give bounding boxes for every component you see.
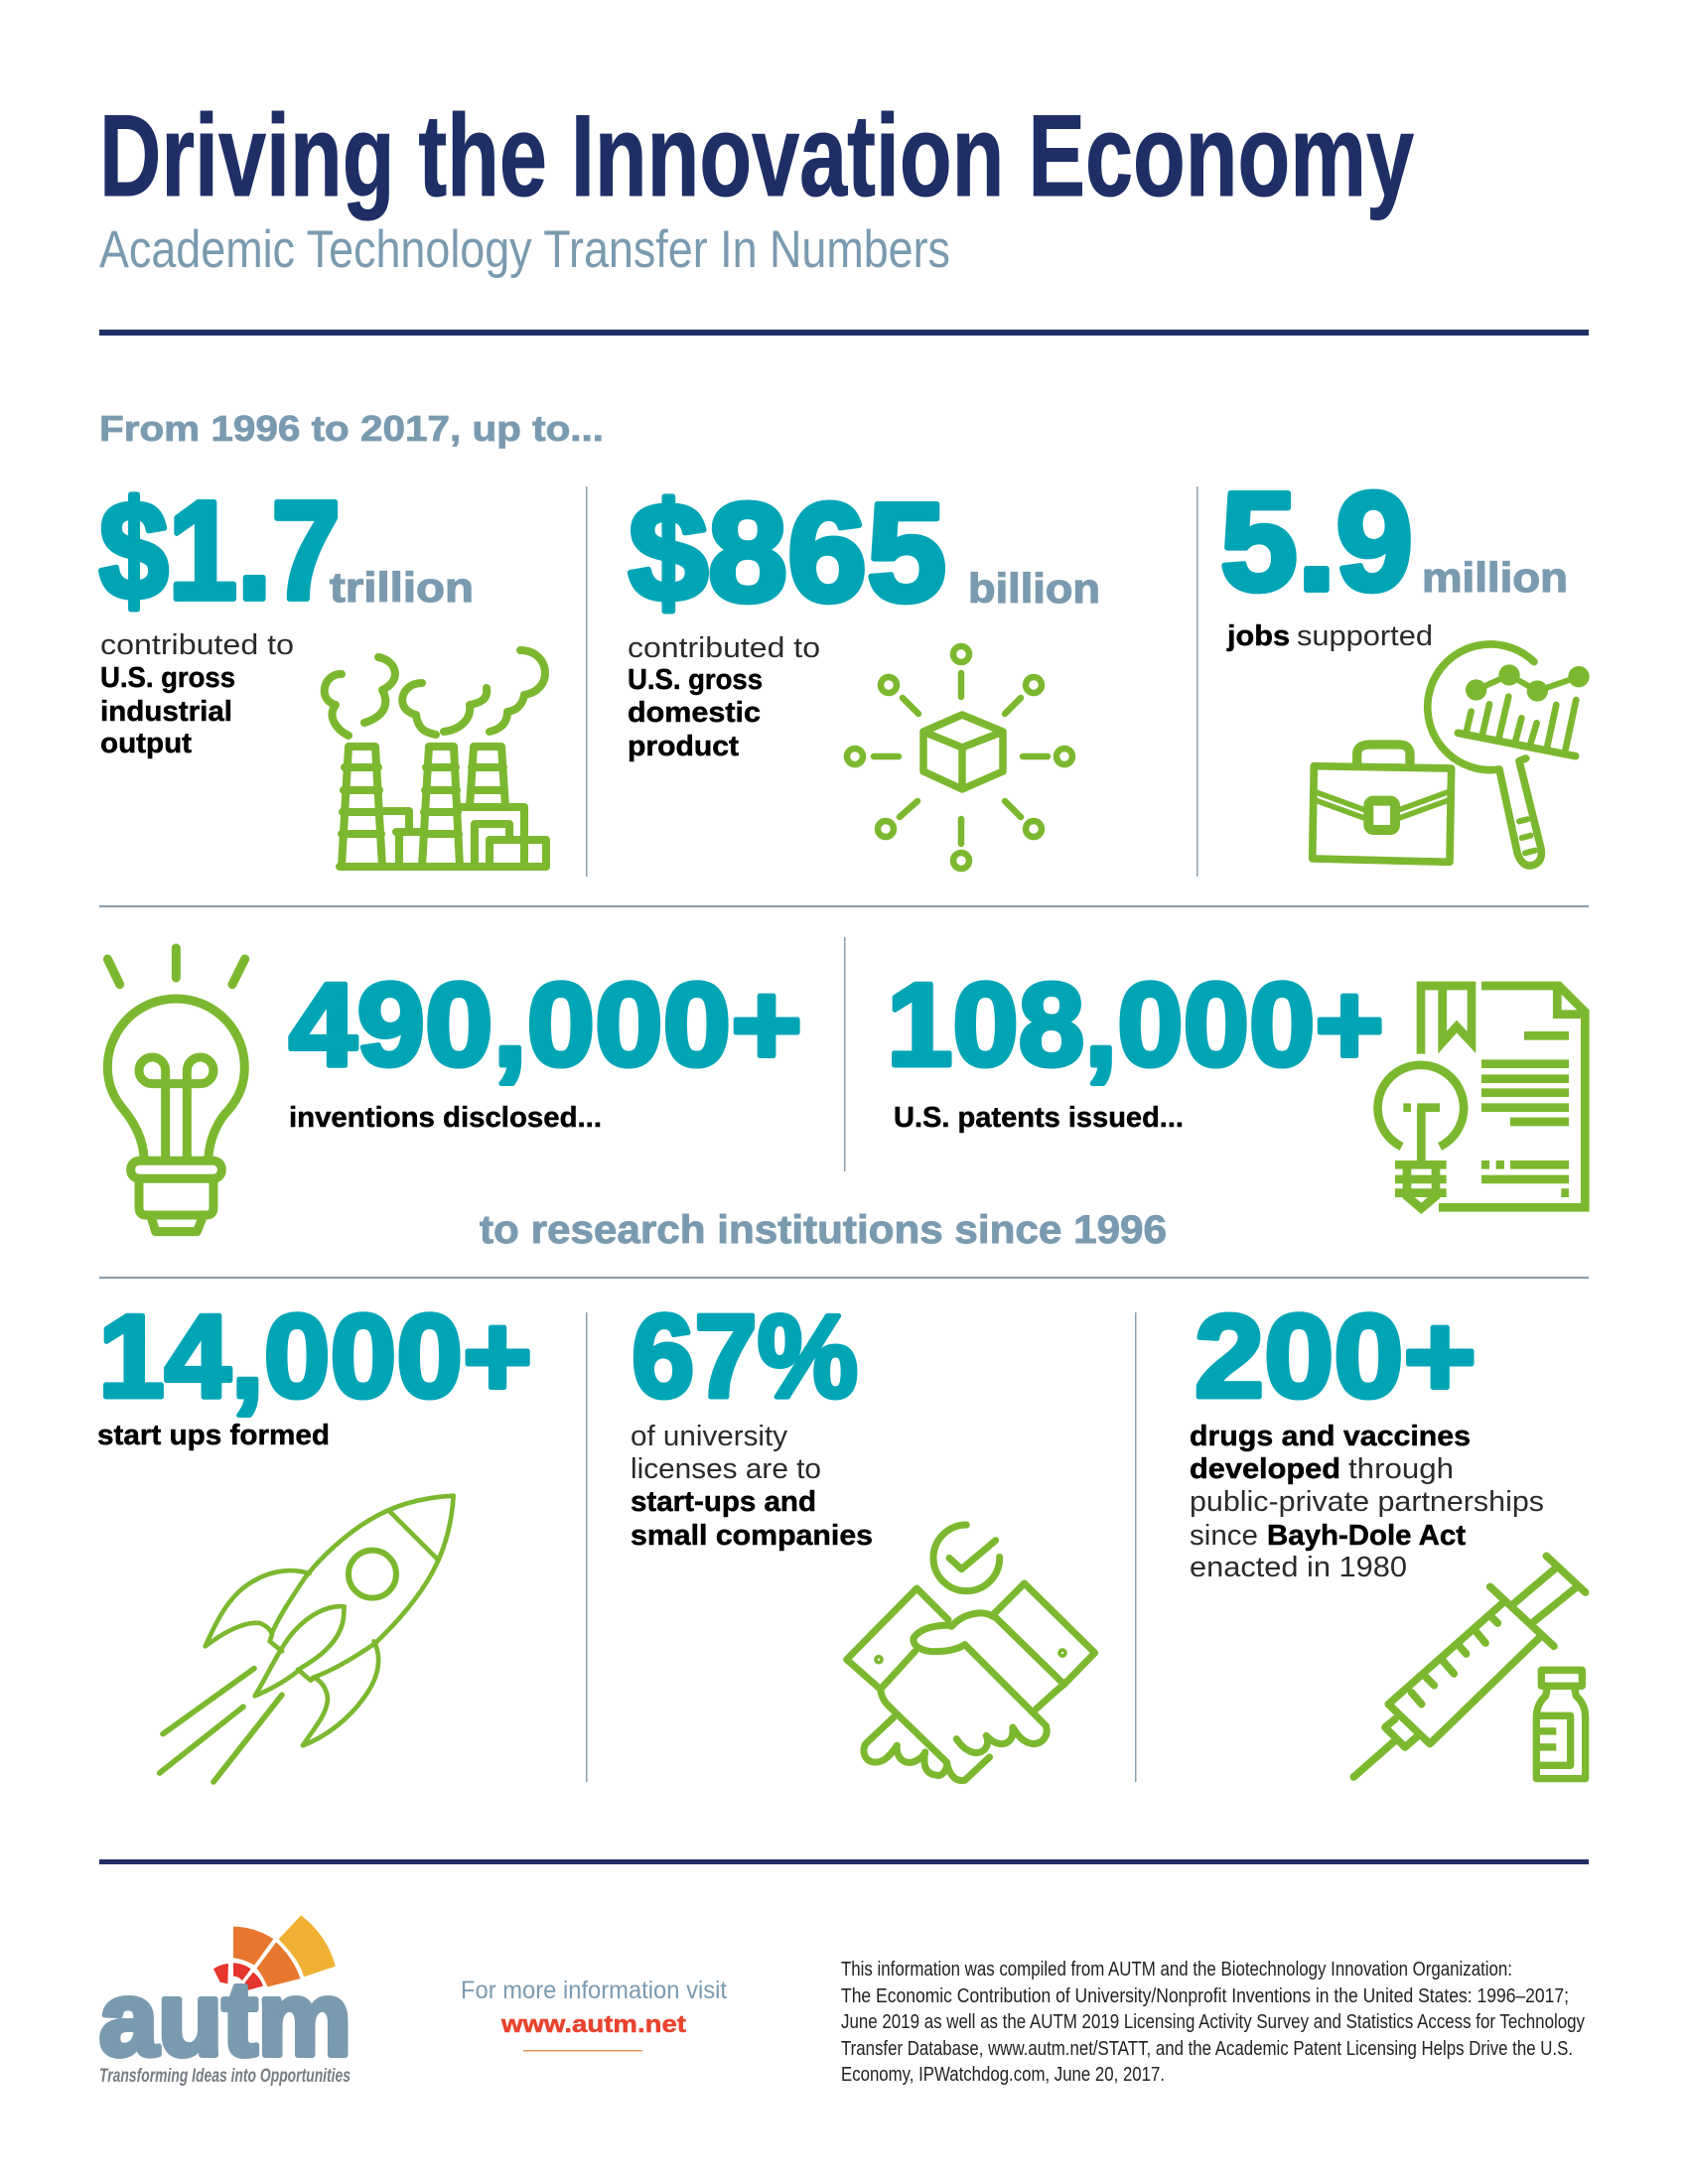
panel: gross domestic product [628,474,1100,869]
stat: 5.9 million: 5.9 [1220,463,1413,619]
icon: patent document with bulb [1377,986,1586,1208]
icon: logo fan [213,1917,335,1991]
tagline: Transforming Ideas into Opportunities [99,2066,351,2087]
accent line [523,2050,642,2051]
icon: briefcase and magnifier [1313,644,1587,866]
divider [1196,486,1197,877]
description: drugs and vaccines: enacted in 1980 [1190,1552,1407,1583]
stat: 490,000+: 490,000+ [289,959,802,1091]
description: gross domestic product: U.S. gross [628,664,763,696]
description: licenses to start-ups: licenses are to [631,1453,821,1485]
description: jobs supported: supported [1297,620,1433,652]
stat: 108,000+: 108,000+ [887,959,1384,1091]
description: gross industrial output [100,629,294,759]
description: licenses to start-ups: of university [631,1421,788,1452]
panel: patents issued [887,959,1586,1208]
description: gross industrial output: contributed to [100,629,294,661]
panel: industrial output [99,472,546,867]
stat: $865 billion: $865 [629,474,946,630]
divider [1135,1312,1136,1782]
description: drugs and vaccines: through [1348,1453,1454,1485]
section rule [99,905,1589,907]
description: drugs and vaccines: Bayh-Dole Act [1267,1520,1466,1552]
description: gross industrial output: output [100,728,192,759]
panel: drugs and vaccines [1190,1291,1586,1779]
stat: 67%: 67% [632,1291,858,1423]
more information text: For more information visit [461,1977,727,2004]
panel: jobs supported [1220,463,1587,866]
icon: factory [325,650,546,867]
stat: 14,000+: 14,000+ [98,1291,532,1423]
stat: 200+: 200+ [1195,1291,1477,1423]
divider [586,1312,588,1782]
divider [844,937,846,1171]
logo: AUTM [99,1917,352,2087]
description: patents issued: U.S. patents issued... [894,1102,1184,1134]
wordmark: autm [99,1961,352,2078]
divider [586,486,588,877]
stat: 5.9 million [1220,463,1568,619]
description: drugs and vaccines: since [1190,1520,1258,1552]
stat: $1.7 trillion: trillion [330,564,474,611]
header rule [99,330,1589,336]
icon: rocket [160,1496,454,1782]
panel: inventions disclosed [107,948,802,1232]
description: drugs and vaccines: public-private partnerships [1190,1486,1544,1518]
description: jobs supported: jobs [1226,620,1290,652]
footer rule [99,1859,1589,1864]
icon: cube network [847,646,1072,869]
description: licenses to start-ups: small companies [631,1520,873,1552]
description: gross domestic product: domestic [628,697,761,729]
description: gross domestic product: contributed to [628,632,820,664]
stat: $1.7 trillion: $1.7 [99,472,341,628]
description: gross domestic product [628,632,820,762]
section rule [99,1277,1589,1279]
section heading: research institutions: to research institutions since 1996 [480,1208,1167,1252]
sources text: Economy, IPWatchdog.com, June 20, 2017. [841,2064,1165,2086]
description: drugs and vaccines: developed [1190,1453,1340,1485]
sources text [841,1959,1585,2086]
icon: handshake [847,1525,1095,1781]
section heading: from 1996: From 1996 to 2017, up to... [99,408,604,449]
subtitle: Academic Technology Transfer In Numbers [99,220,950,279]
description: start ups formed: start ups formed [97,1420,330,1451]
description: gross industrial output: U.S. gross [100,662,235,694]
description: licenses to start-ups: start-ups and [631,1486,816,1518]
stat: $865 billion: billion [968,565,1100,612]
description: licenses to start-ups [631,1421,873,1552]
panel: start ups [97,1291,532,1782]
stat: $865 billion [629,474,1100,630]
stat: 5.9 million: million [1422,554,1568,601]
description: drugs and vaccines: drugs and vaccines [1190,1421,1471,1452]
call to action [461,1977,727,2051]
description: inventions disclosed: inventions disclosed... [289,1102,602,1134]
description: jobs supported [1226,620,1433,652]
website link: www.autm.net [500,2011,686,2038]
sources text: This information was compiled from AUTM and the Biotechnology Innovation Organization: [841,1959,1512,1980]
icon: vial [1536,1670,1586,1779]
icon: light bulb [107,948,245,1232]
sources text: Transfer Database, www.autm.net/STATT, and the Academic Patent Licensing Helps Drive the U.S. [841,2038,1573,2060]
description: gross industrial output: industrial [100,696,232,728]
sources text: The Economic Contribution of University/Nonprofit Inventions in the United States: 1996–2017; [841,1985,1569,2007]
description: drugs and vaccines [1190,1421,1544,1583]
panel: licenses [631,1291,1095,1781]
description: gross domestic product: product [628,731,739,762]
icon: syringe [1353,1556,1586,1777]
